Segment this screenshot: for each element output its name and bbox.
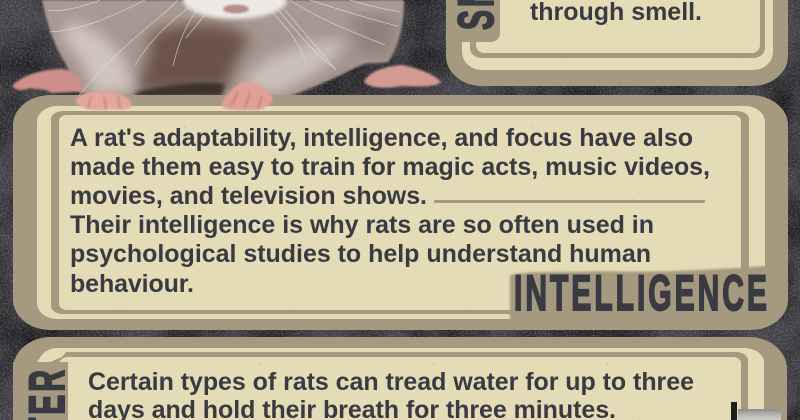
rat whiskers xyxy=(48,0,400,100)
illustration: rat xyxy=(12,0,441,100)
rat chest shading xyxy=(136,24,250,90)
rat light fur xyxy=(62,20,134,94)
panel: intelligence xyxy=(13,95,788,330)
heading tab: water xyxy=(13,351,75,420)
paragraph: intelligence: made them easy to train for magic acts, music videos, xyxy=(70,153,710,181)
panel: water xyxy=(13,337,787,420)
heading tab: smell xyxy=(446,0,504,42)
paragraph: intelligence: psychological studies to help understand human xyxy=(70,240,651,268)
paragraph: water xyxy=(88,368,694,420)
rat front right paw xyxy=(221,81,273,110)
paragraph: intelligence: Their intelligence is why rats are so often used in xyxy=(70,211,654,239)
heading tab: intelligence: INTELLIGENCE xyxy=(514,265,770,321)
rat body xyxy=(42,0,404,100)
panel: smell xyxy=(446,0,788,86)
rat front paws overlapping the panel xyxy=(76,81,273,110)
rat back left foot xyxy=(12,69,84,93)
icon: metal object xyxy=(731,402,781,420)
rat back right foot xyxy=(364,65,441,88)
rat front left paw xyxy=(76,92,132,110)
paragraph: intelligence: behaviour. xyxy=(70,270,194,298)
paragraph: intelligence: A rat's adaptability, intelligence, and focus have also xyxy=(70,124,693,152)
paragraph: intelligence xyxy=(70,124,710,298)
paragraph: water: Certain types of rats can tread water for up to three xyxy=(88,368,694,396)
rat chin and mouth xyxy=(183,0,287,19)
paragraph: intelligence: movies, and television shows. xyxy=(70,182,427,210)
